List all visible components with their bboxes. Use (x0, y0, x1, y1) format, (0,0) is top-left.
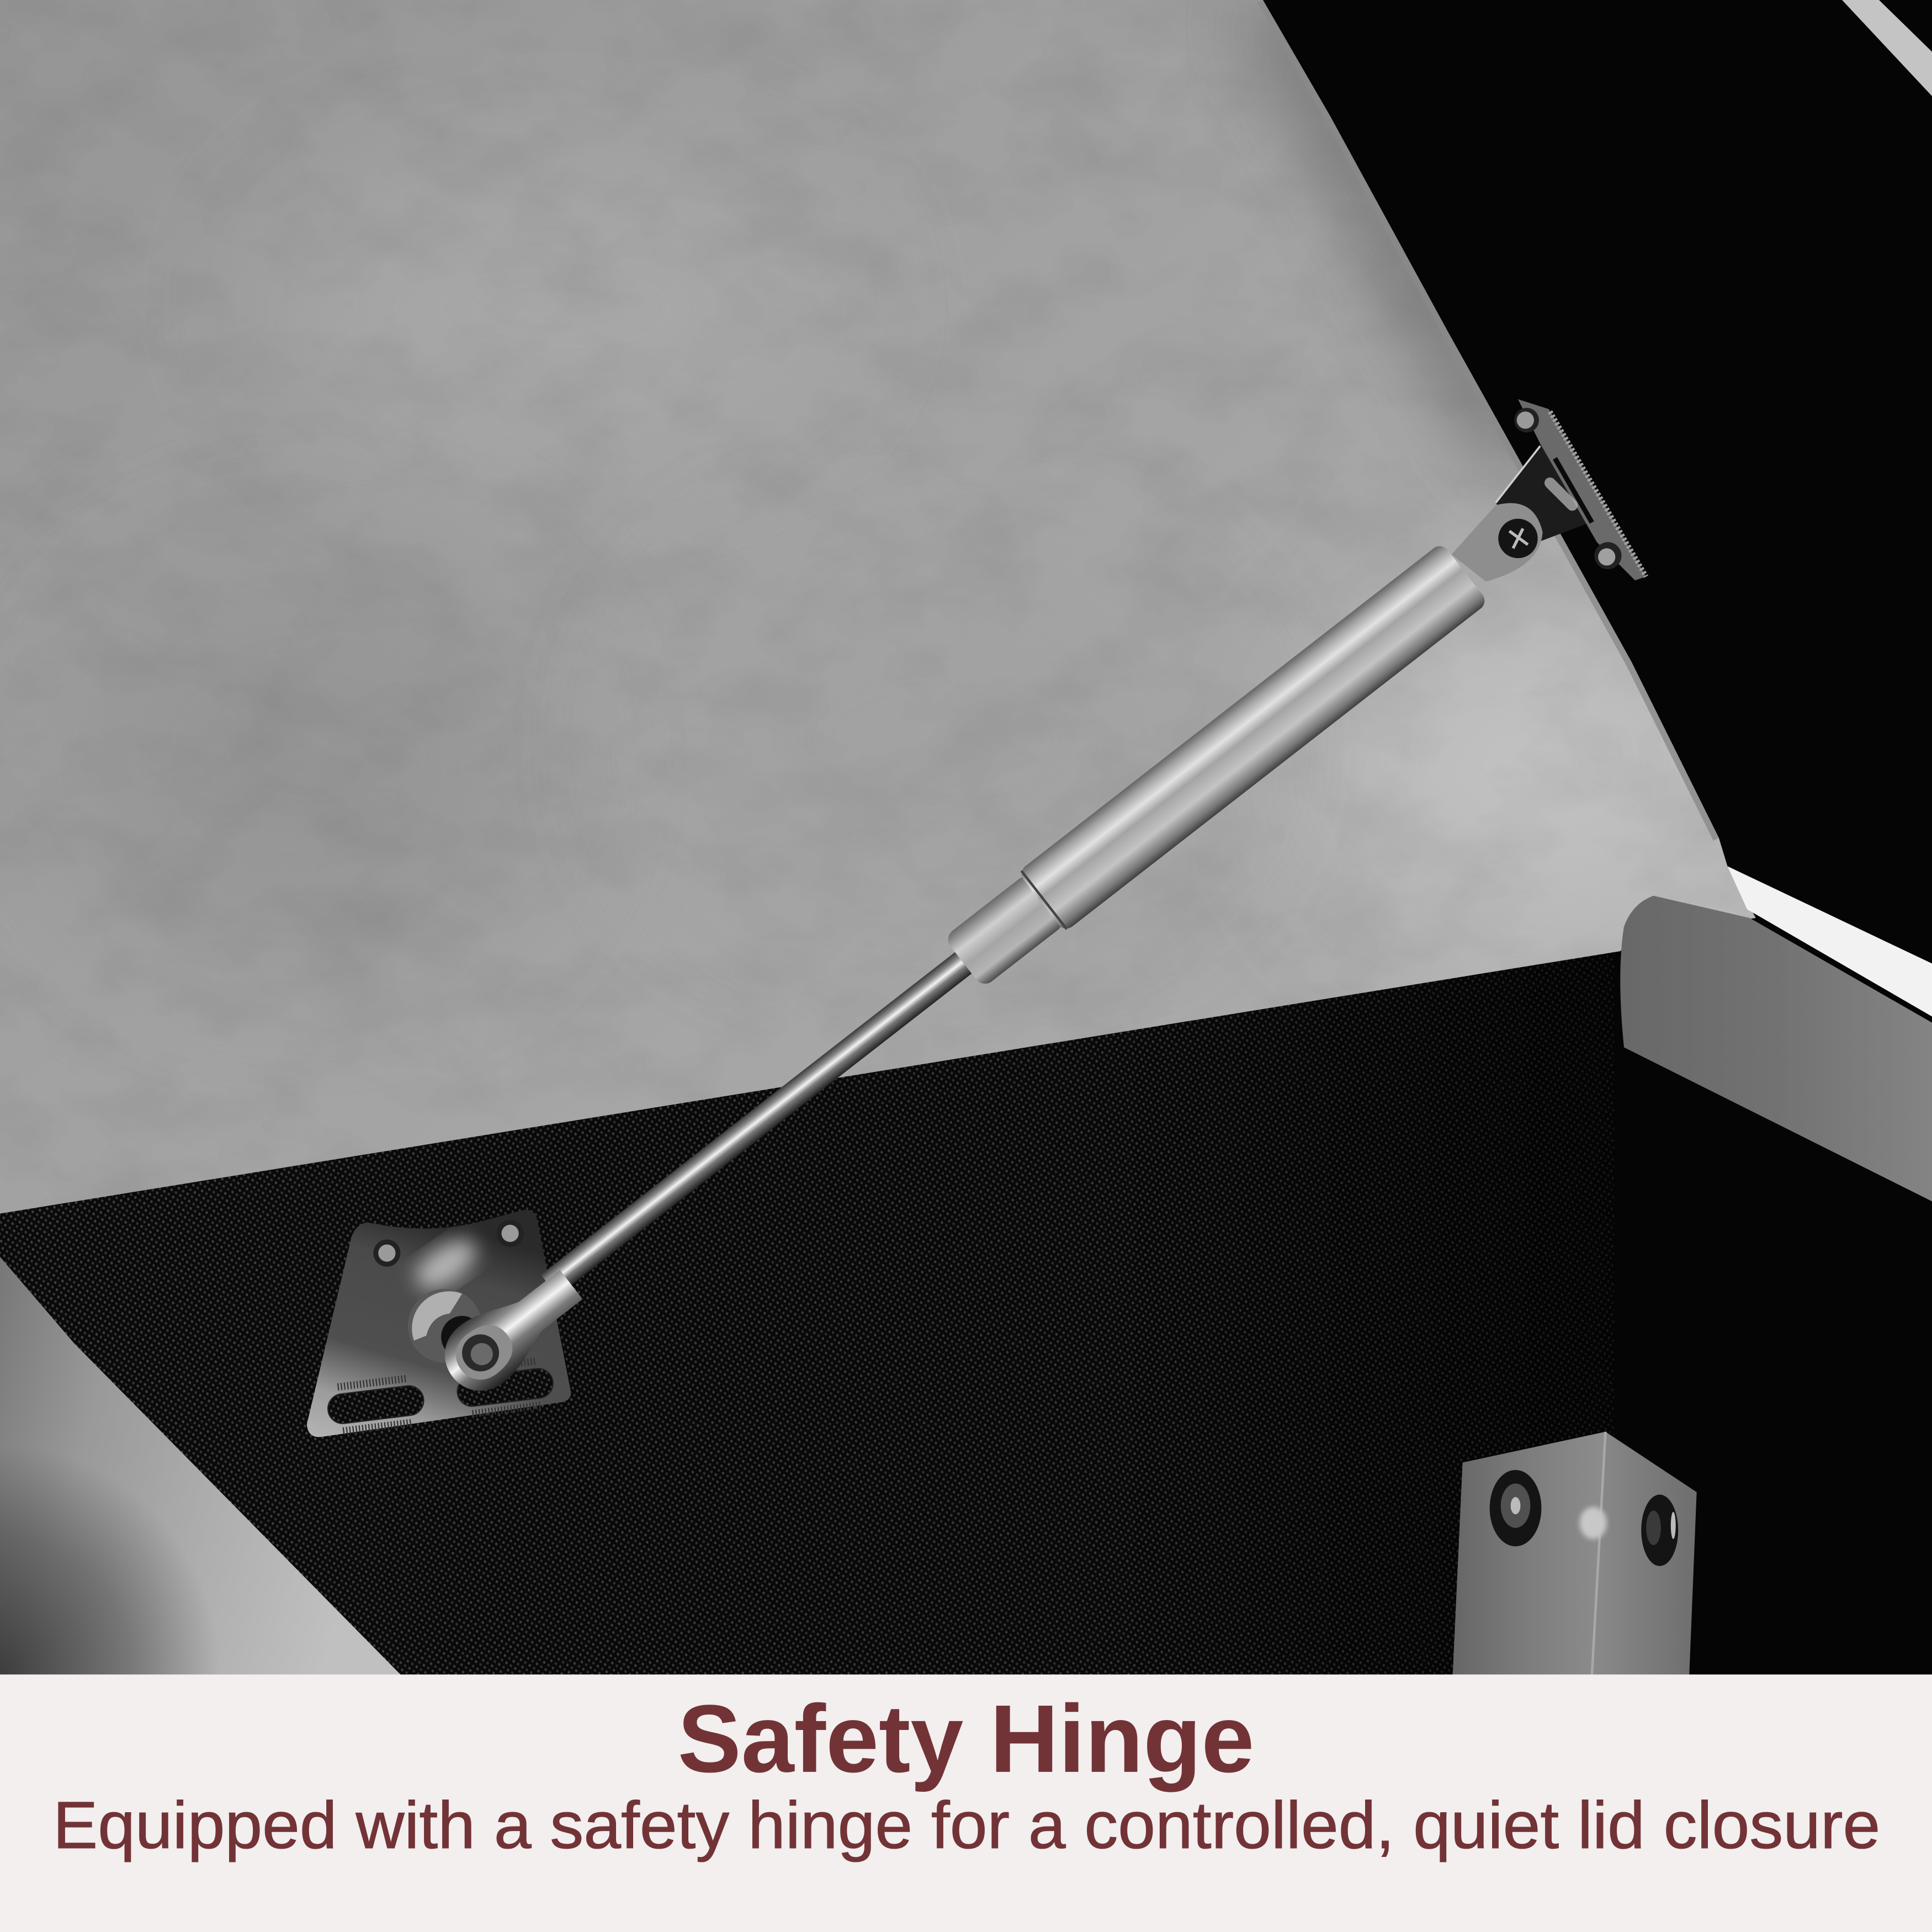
upper wall bracket (1496, 399, 1646, 580)
lower mounting plate (307, 1210, 571, 1437)
cylinder cap (944, 873, 1066, 988)
black fabric lining (0, 951, 1621, 1675)
bolt, left (1490, 1470, 1541, 1546)
plate screw, left (373, 1240, 400, 1267)
plate screw, right (497, 1220, 524, 1247)
title: Safety Hinge (678, 1685, 1254, 1792)
gas strut rod (541, 942, 985, 1296)
corner bracket, bottom right (1453, 1432, 1697, 1674)
gas strut cylinder (940, 542, 1489, 993)
window frame strip, top right (1842, 0, 1932, 96)
caption panel (0, 1674, 1932, 1932)
description: Equipped with a safety hinge for a controlled, quiet lid closure (53, 1788, 1880, 1862)
bracket screw, bottom (1594, 542, 1622, 569)
main cylinder (1018, 542, 1489, 932)
pivot boss (408, 1289, 483, 1363)
padded arm, bottom left (0, 1257, 400, 1674)
padded rim, right (1620, 896, 1932, 1201)
plate slot, right (455, 1360, 555, 1415)
strut upper link with screw (1451, 503, 1543, 582)
white highlight strip by the rim (1727, 866, 1932, 1017)
bracket screw, top (1514, 408, 1539, 432)
black interior behind lid (0, 0, 1932, 1214)
plate slot, left (326, 1377, 426, 1432)
bolt, right (1641, 1495, 1678, 1566)
velvet lid underside (0, 0, 1756, 1213)
rod end eye and sleeve (431, 1256, 593, 1405)
